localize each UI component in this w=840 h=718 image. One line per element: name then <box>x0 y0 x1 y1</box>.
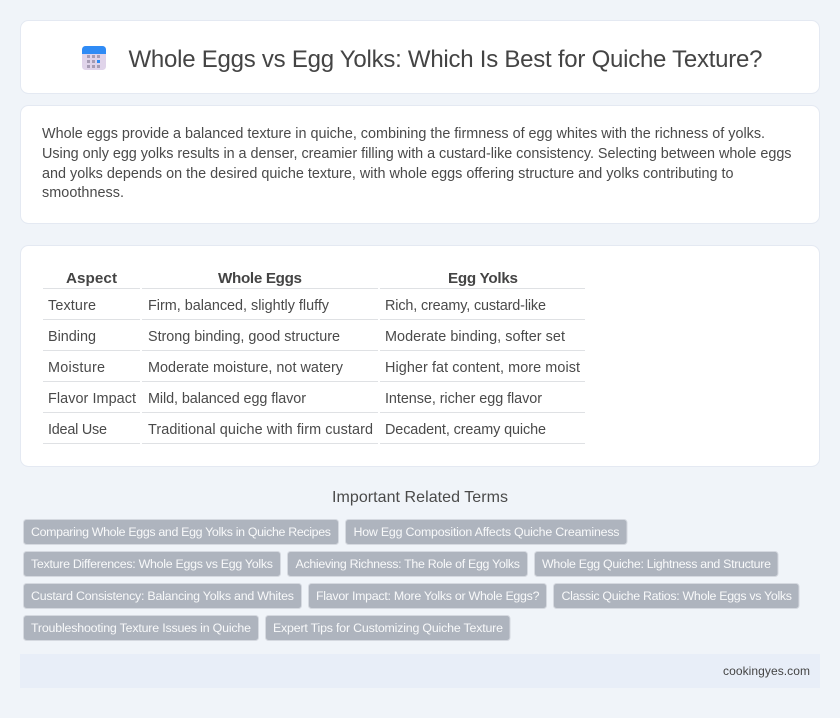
row: texture: Texture <box>48 298 96 314</box>
row: ideal use <box>43 422 585 444</box>
tag: Troubleshooting Texture Issues in Quiche <box>31 621 251 635</box>
tag <box>24 584 302 608</box>
text block: intro: Whole eggs provide a balanced texture in quiche, combining the firmness of egg whites with the richness of yolks. <box>42 126 765 142</box>
row: flavor impact: Flavor Impact <box>48 391 136 407</box>
tag: How Egg Composition Affects Quiche Creaminess <box>354 525 620 539</box>
panel: comparison table <box>20 246 820 466</box>
row: moisture: Higher fat content, more moist <box>385 360 580 376</box>
title: Whole Eggs vs Egg Yolks: Which Is Best for Quiche Texture? <box>128 46 762 73</box>
tag <box>288 552 528 576</box>
row: ideal use: Traditional quiche with firm custard <box>148 422 373 438</box>
row: moisture: Moisture <box>48 360 105 376</box>
icon: calendar <box>82 46 106 70</box>
tag: Achieving Richness: The Role of Egg Yolks <box>296 557 520 571</box>
table header: Egg Yolks <box>448 270 518 287</box>
text block: intro <box>42 126 792 201</box>
panel: intro paragraph <box>20 106 820 224</box>
tag: Expert Tips for Customizing Quiche Texture <box>273 621 503 635</box>
related term tags <box>24 520 799 640</box>
tag <box>308 584 546 608</box>
tag: Custard Consistency: Balancing Yolks and Whites <box>31 589 294 603</box>
footer source: cookingyes.com <box>723 664 810 678</box>
table header: Aspect <box>66 270 117 287</box>
tag <box>346 520 627 544</box>
tag <box>554 584 799 608</box>
tag: Comparing Whole Eggs and Egg Yolks in Quiche Recipes <box>31 525 331 539</box>
row: moisture <box>43 360 585 382</box>
tag: Texture Differences: Whole Eggs vs Egg Yolks <box>31 557 273 571</box>
row: ideal use: Ideal Use <box>48 422 107 438</box>
row: texture <box>43 298 585 320</box>
table header <box>43 270 585 289</box>
row: texture: Firm, balanced, slightly fluffy <box>148 298 330 314</box>
row: binding: Strong binding, good structure <box>148 329 340 345</box>
tag: Classic Quiche Ratios: Whole Eggs vs Yolks <box>562 589 792 603</box>
row: moisture: Moderate moisture, not watery <box>148 360 344 376</box>
row: binding <box>43 329 585 351</box>
row: texture: Rich, creamy, custard-like <box>385 298 546 314</box>
heading: related terms: Important Related Terms <box>332 489 508 506</box>
tag <box>24 520 338 544</box>
text block: intro: and yolks depends on the desired quiche texture, with whole eggs offering structure and yolks contributing to <box>42 166 734 182</box>
row: binding: Binding <box>48 329 96 345</box>
row: flavor impact: Mild, balanced egg flavor <box>148 391 306 407</box>
tag: Whole Egg Quiche: Lightness and Structure <box>542 557 771 571</box>
tag <box>534 552 778 576</box>
table header: Whole Eggs <box>218 270 302 287</box>
row: flavor impact: Intense, richer egg flavor <box>385 391 542 407</box>
text block: intro: Using only egg yolks results in a denser, creamier filling with a custard-like consistency. Selecting between whole eggs <box>42 146 792 162</box>
tag <box>266 616 510 640</box>
tag <box>24 616 258 640</box>
tag: Flavor Impact: More Yolks or Whole Eggs? <box>316 589 540 603</box>
text block: intro: smoothness. <box>42 185 124 201</box>
row: flavor impact <box>43 391 585 413</box>
footer <box>20 654 820 688</box>
header panel <box>20 20 820 94</box>
row: binding: Moderate binding, softer set <box>385 329 565 345</box>
tag <box>24 552 280 576</box>
row: ideal use: Decadent, creamy quiche <box>385 422 546 438</box>
